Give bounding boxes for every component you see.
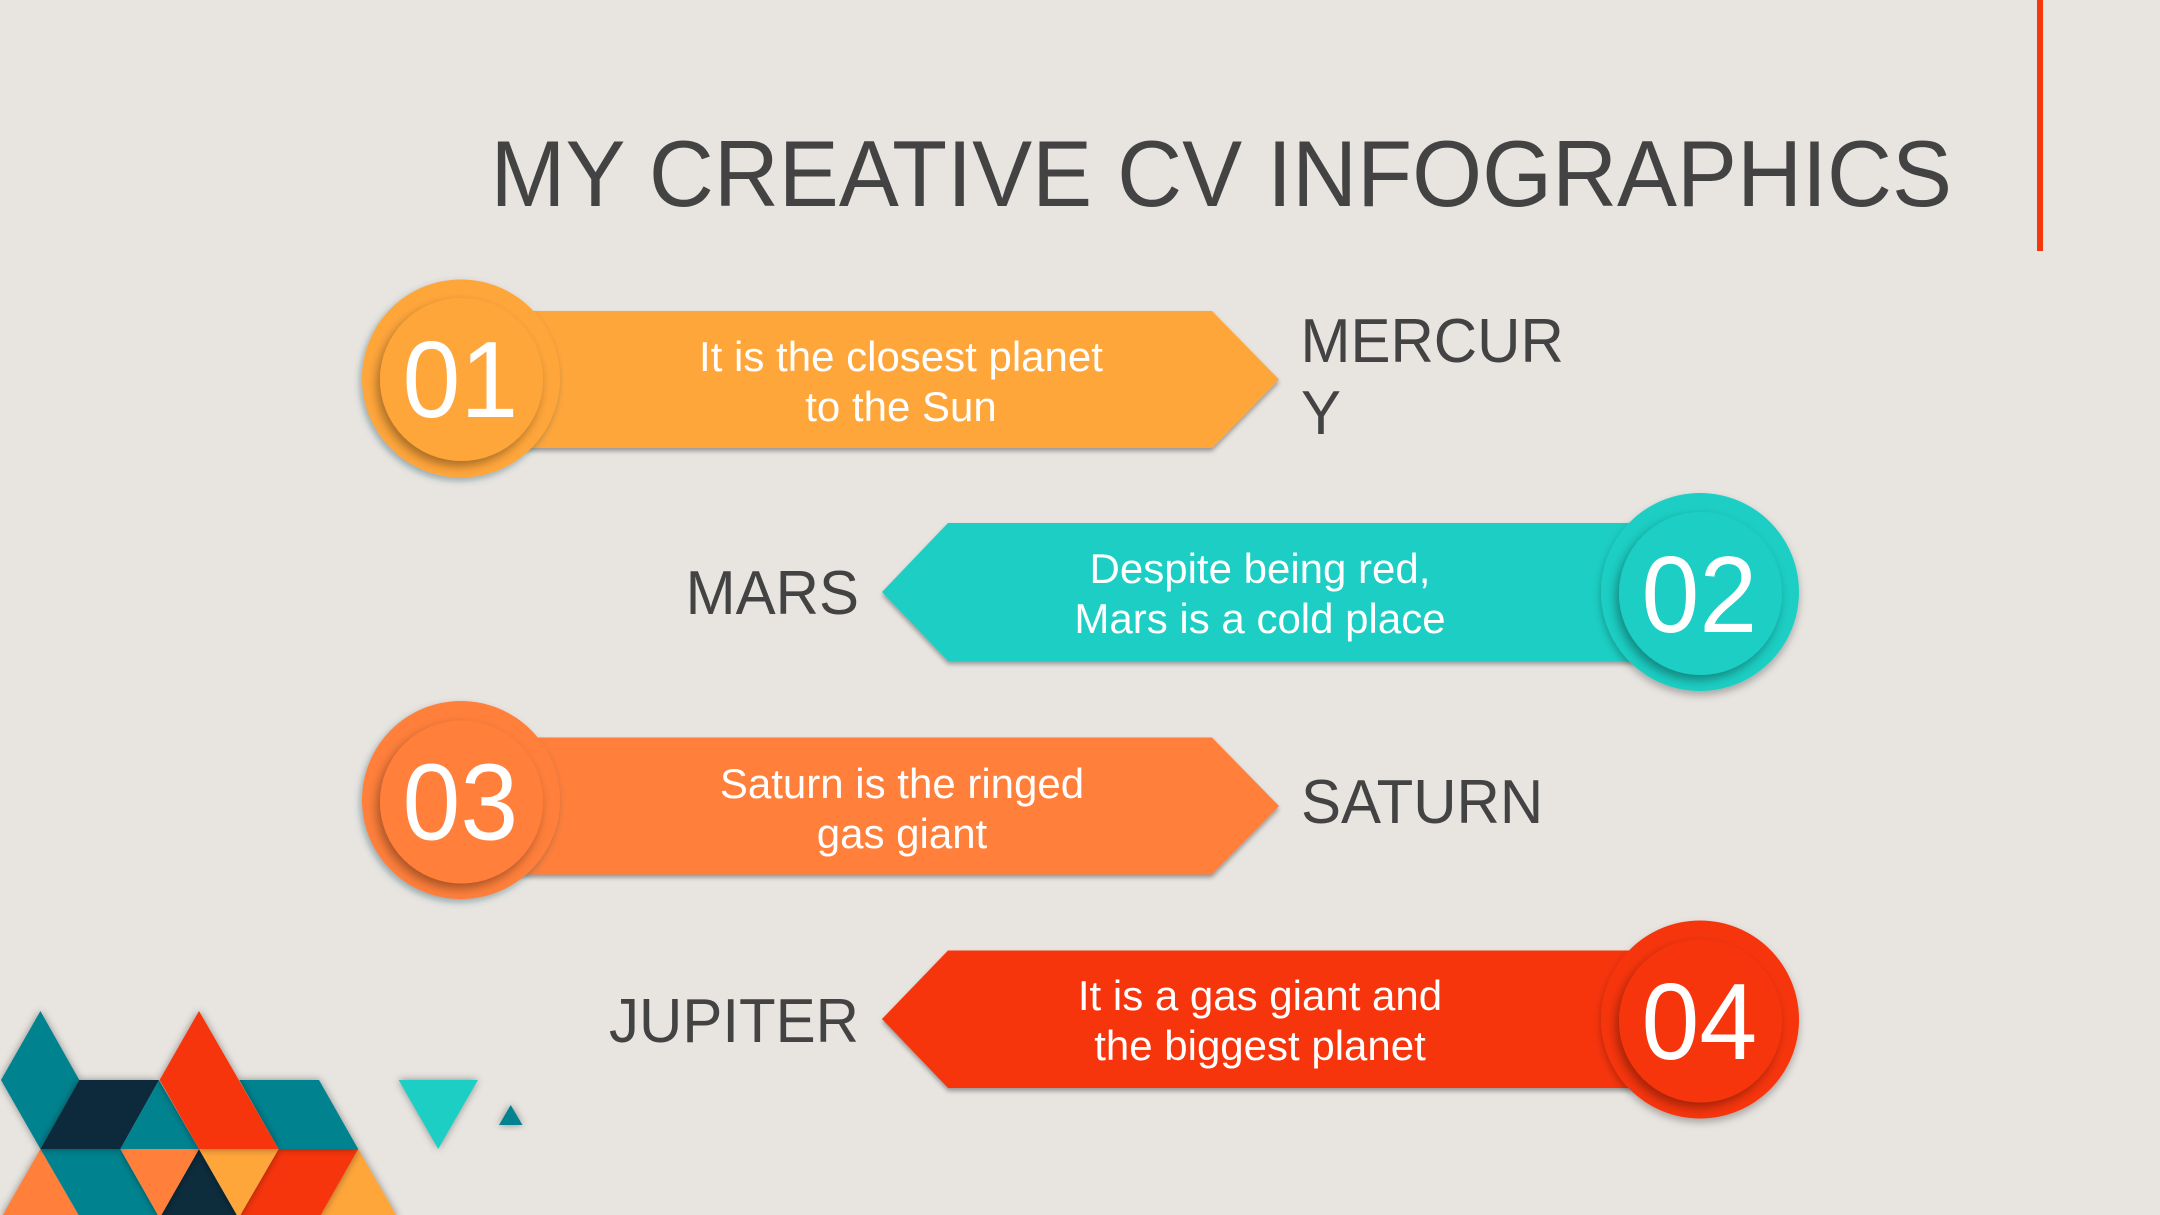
number badge 04 xyxy=(1601,920,1799,1118)
description 02: Despite being red, xyxy=(1090,545,1430,592)
description 03: Saturn is the ringed xyxy=(720,760,1084,807)
arrow banner 04 xyxy=(882,950,1700,1088)
description 01: to the Sun xyxy=(805,383,997,430)
decorative triangle mosaic xyxy=(1,1011,398,1215)
label: Mercury: Y xyxy=(1301,378,1341,447)
description 01: It is the closest planet xyxy=(699,333,1103,380)
number badge 03 xyxy=(362,701,560,899)
red accent line xyxy=(2037,0,2043,251)
number badge 02 xyxy=(1601,493,1799,691)
row 3: Saturn xyxy=(362,701,1543,899)
row 2: Mars xyxy=(686,493,1799,691)
small teal triangle xyxy=(499,1105,522,1125)
label: Jupiter: JUPITER xyxy=(609,986,859,1055)
row 1: Mercury xyxy=(362,280,1564,478)
description 02: Mars is a cold place xyxy=(1074,595,1446,642)
label: Mars: MARS xyxy=(686,558,859,627)
arrow banner 03 xyxy=(461,738,1279,874)
label: Mercury xyxy=(1300,306,1564,447)
number badge 01 xyxy=(362,280,560,478)
turquoise triangle xyxy=(399,1080,478,1149)
description 03: gas giant xyxy=(817,810,988,857)
number badge 02: 02 xyxy=(1642,535,1757,655)
number badge 03: 03 xyxy=(402,743,518,863)
title: MY CREATIVE CV INFOGRAPHICS xyxy=(490,122,1952,226)
number badge 04: 04 xyxy=(1642,962,1757,1082)
arrow banner 01 xyxy=(461,311,1279,448)
label: Mercury: MERCUR xyxy=(1300,306,1564,375)
row 4: Jupiter xyxy=(609,920,1799,1118)
label: Saturn: SATURN xyxy=(1301,767,1543,836)
arrow banner 02 xyxy=(882,523,1700,661)
description 04: the biggest planet xyxy=(1094,1022,1426,1069)
description 04: It is a gas giant and xyxy=(1078,972,1442,1019)
number badge 01: 01 xyxy=(402,320,518,440)
